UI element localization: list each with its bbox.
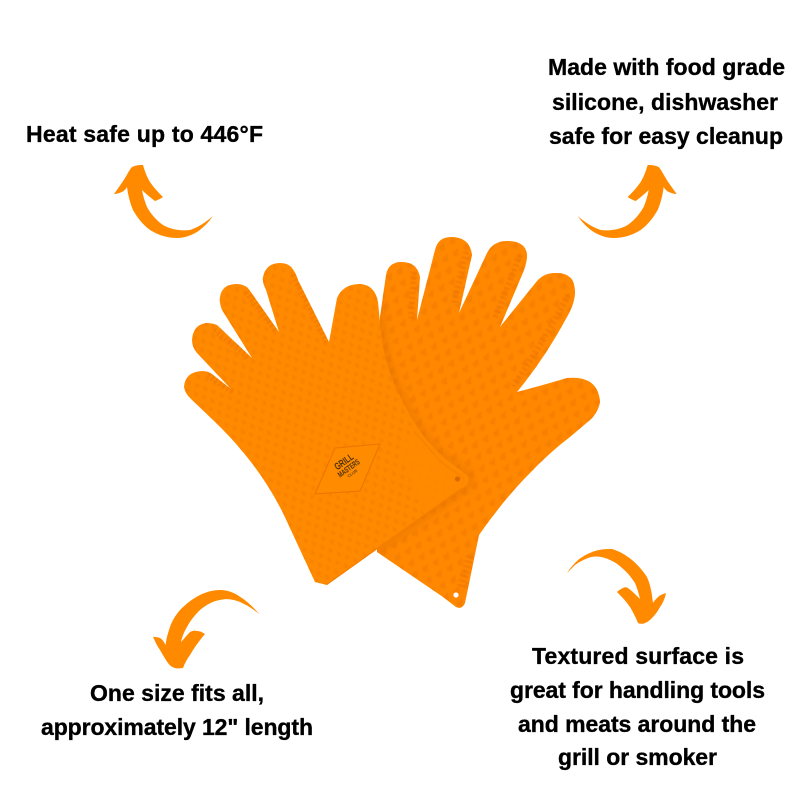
logo diamond: MASTERS <box>336 457 362 479</box>
caption: food grade silicone <box>548 54 785 149</box>
arrow: bottom right <box>567 549 666 624</box>
product photo: pair of orange silicone gloves <box>175 230 610 615</box>
caption: food grade silicone: Made with food grade <box>548 54 785 80</box>
caption: one size fits all: approximately 12" length <box>41 714 313 740</box>
caption: one size fits all <box>41 680 313 740</box>
caption: one size fits all: One size fits all, <box>90 680 264 706</box>
hanging hole: rear glove <box>453 592 459 598</box>
caption: textured surface: grill or smoker <box>558 744 717 770</box>
logo diamond <box>315 444 380 494</box>
grip ridges on rear glove fingers <box>411 252 568 590</box>
arrow: bottom left <box>153 590 259 668</box>
logo diamond: GRILL <box>333 452 356 473</box>
smooth cuff corner <box>400 420 472 515</box>
arrow: top left <box>114 165 213 238</box>
caption: food grade silicone: safe for easy cleanup <box>549 123 783 149</box>
caption: textured surface: great for handling tools <box>510 677 765 703</box>
logo diamond: CLUB <box>346 468 358 479</box>
glove: rear right-hand glove <box>377 237 600 608</box>
caption: textured surface: Textured surface is <box>532 643 744 669</box>
caption: textured surface <box>510 643 765 770</box>
glove: front left-hand glove <box>184 263 469 585</box>
caption: food grade silicone: silicone, dishwasher <box>552 89 778 115</box>
hanging hole: front glove <box>455 476 460 482</box>
caption: textured surface: and meats around the <box>518 711 756 737</box>
caption: heat safe: Heat safe up to 446°F <box>26 121 263 147</box>
arrow: top right <box>578 165 677 238</box>
grip ridges on front glove fingers <box>208 275 327 393</box>
